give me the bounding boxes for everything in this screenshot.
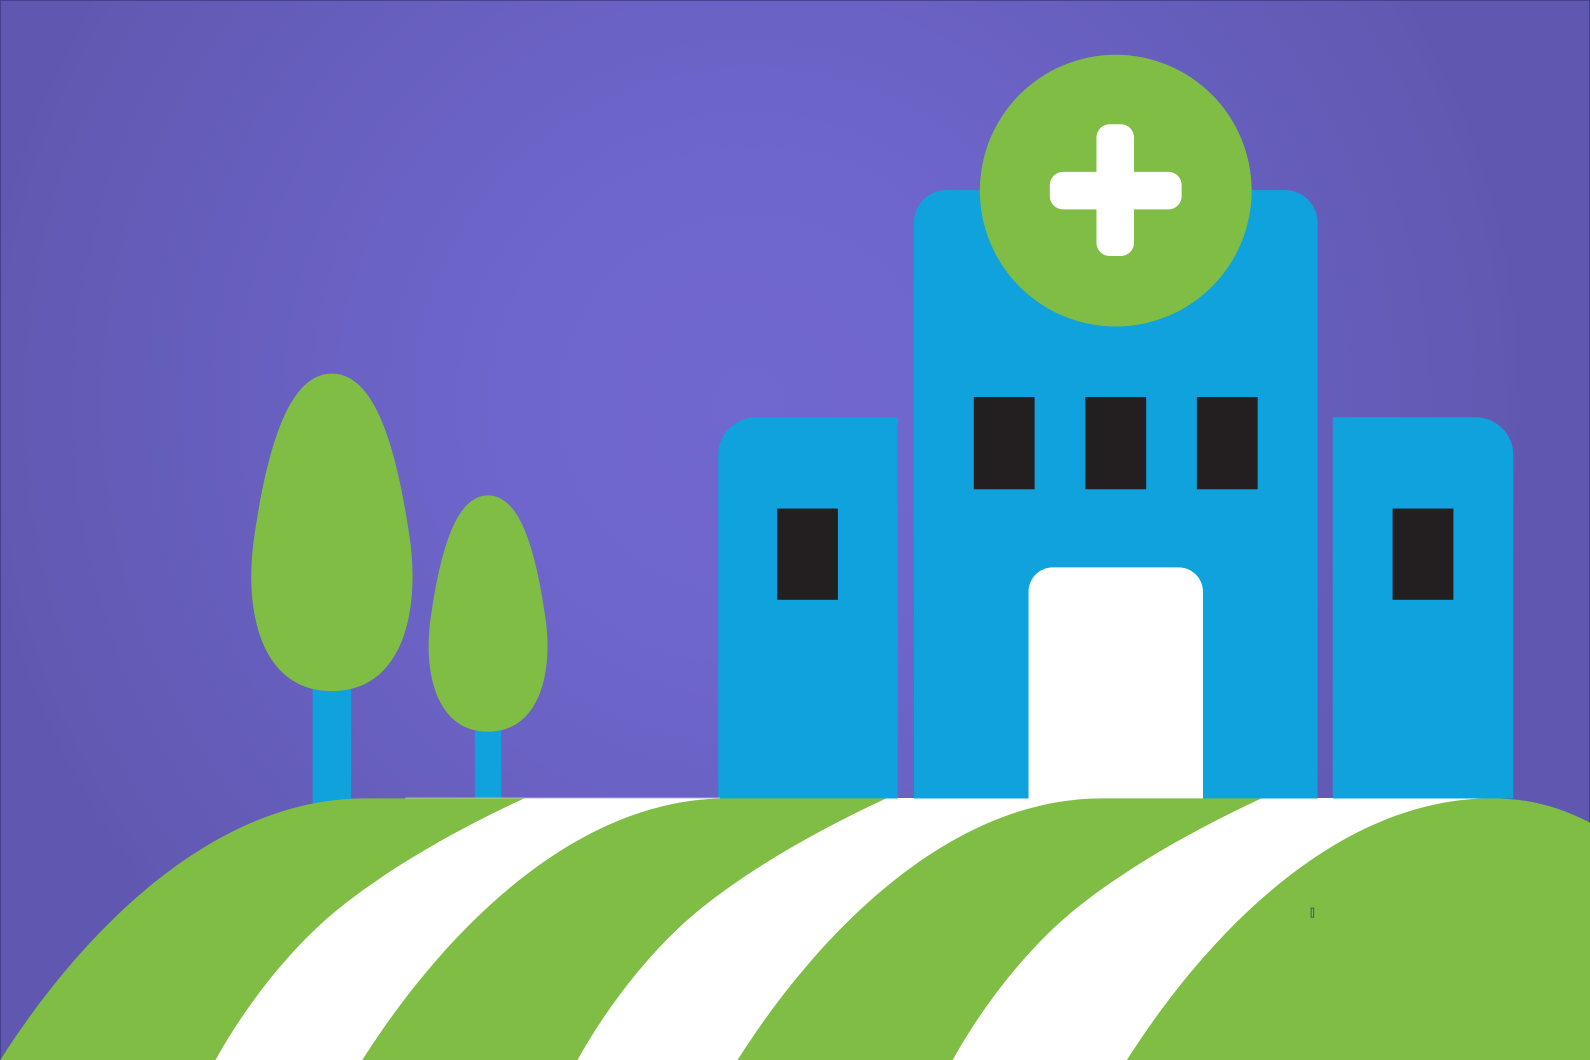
tree: large	[251, 374, 413, 807]
hill stripe 1	[0, 798, 524, 1060]
windows: central row	[974, 397, 1258, 489]
horizon line	[406, 798, 720, 799]
hill stripe 4	[1127, 798, 1590, 1060]
medical sign: green circle with white cross	[980, 55, 1252, 327]
hill stripe 3	[737, 798, 1261, 1060]
right wing	[1333, 417, 1513, 799]
entrance door	[1029, 567, 1203, 800]
central block	[914, 190, 1318, 799]
road band: white stripes	[203, 798, 1501, 1060]
tree: small	[429, 495, 548, 799]
hills: green stripes	[0, 798, 1590, 1060]
small mark on hill	[1311, 908, 1314, 917]
hill stripe 2	[362, 798, 886, 1060]
hospital building	[718, 55, 1513, 800]
left wing	[718, 417, 898, 799]
